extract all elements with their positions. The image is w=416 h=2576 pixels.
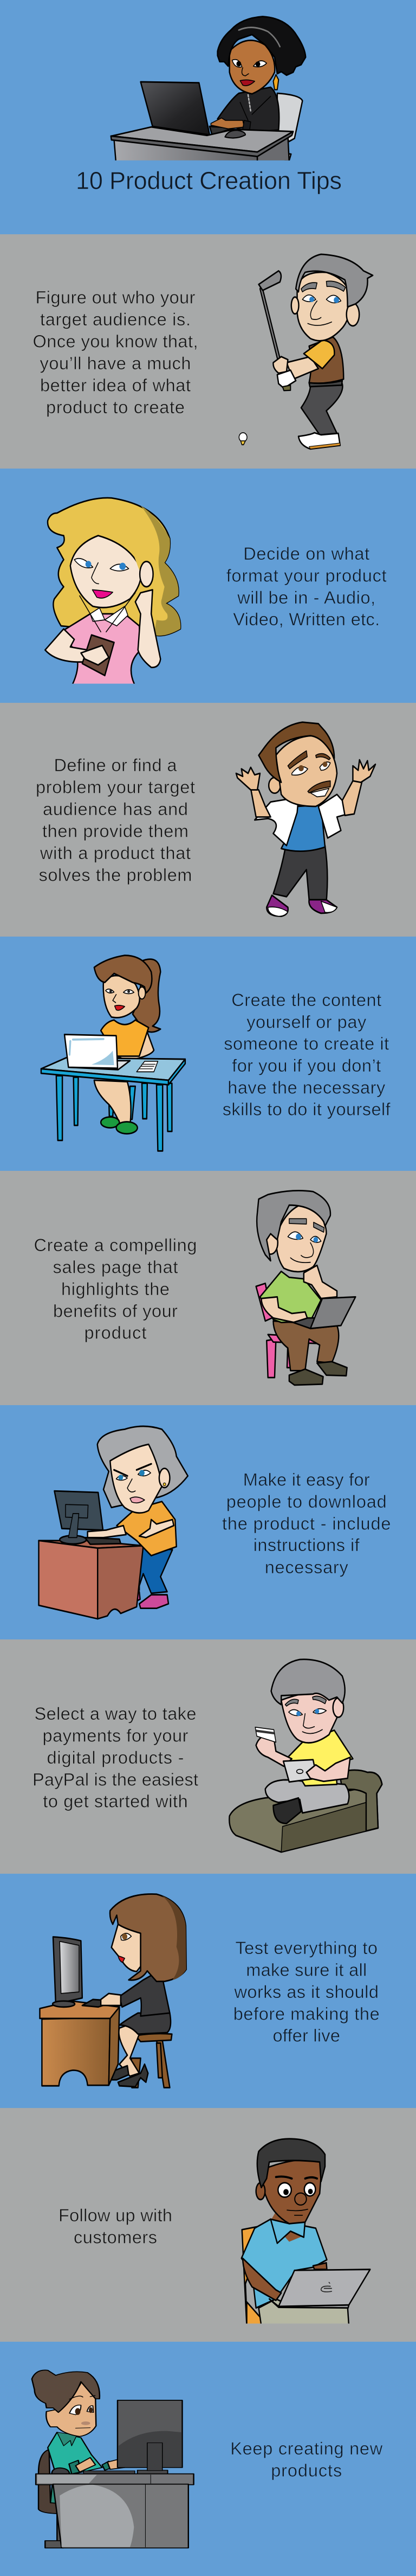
panel: tip 1 target audience — [0, 234, 416, 469]
panel: tip 3 problem — [0, 703, 416, 937]
text: tip 6: necessary — [265, 1558, 348, 1577]
text: tip 4: someone to create it — [224, 1034, 389, 1053]
panel: tip 7 payments — [0, 1639, 416, 1874]
text: tip 10: products — [271, 2461, 342, 2481]
illustration: woman with hair bun at grey desk and monitor — [32, 2370, 194, 2548]
text: tip 2: Video, Written etc. — [233, 610, 380, 629]
illustration: woman with laptop at blue table — [41, 956, 185, 1151]
text: tip 8: before making the — [233, 2004, 380, 2024]
text: tip 7: digital products - — [47, 1748, 184, 1767]
text: tip 5: highlights the — [61, 1279, 170, 1299]
panel: tip 4 content — [0, 937, 416, 1171]
illustration: grey-haired woman at red desk and monitor — [39, 1426, 188, 1619]
text: tip 4: yourself or pay — [246, 1012, 367, 1031]
text: tip 6: the product - include — [222, 1514, 391, 1533]
illustration: thoughtful man with laptop on pink stool — [256, 1190, 355, 1385]
text: tip 8: offer live — [272, 2026, 340, 2046]
text: tip 3: solves the problem — [39, 866, 192, 885]
title: 10 Product Creation Tips — [76, 167, 342, 194]
text: tip 6: Make it easy for — [243, 1470, 370, 1489]
text: tip 3: Define or find a — [54, 755, 177, 775]
panel: tip 5 sales page — [0, 1171, 416, 1405]
illustration: golfer with club — [239, 254, 373, 449]
text: tip 2: will be in - Audio, — [237, 588, 375, 607]
text: tip 6 — [222, 1470, 391, 1577]
text: tip 6: instructions if — [253, 1535, 360, 1555]
text: tip 2: Decide on what — [243, 544, 369, 563]
text: tip 3: audience has and — [43, 799, 188, 819]
text: tip 7 — [32, 1704, 198, 1811]
text: tip 4: have the necessary — [227, 1078, 386, 1097]
text: tip 9: Follow up with — [58, 2206, 172, 2225]
text: tip 7: payments for your — [42, 1726, 188, 1745]
text: tip 4: for you if you don’t — [232, 1056, 381, 1075]
text: tip 8: works as it should — [233, 1982, 379, 2002]
text: tip 4: skills to do it yourself — [223, 1099, 391, 1119]
text: tip 9 — [58, 2206, 172, 2247]
text: tip 1: target audience is. — [40, 310, 191, 329]
text: tip 3: problem your target — [36, 778, 195, 797]
text: tip 6: people to download — [226, 1492, 387, 1511]
text: tip 7: PayPal is the easiest — [32, 1770, 198, 1790]
text: tip 1: you’ll have a much — [40, 354, 191, 373]
panel: tip 10 keep creating — [0, 2342, 416, 2576]
text: tip 1 — [32, 287, 198, 417]
text: tip 8: make sure it all — [246, 1960, 367, 1980]
text: tip 2: format your product — [226, 566, 387, 586]
text: tip 3: then provide them — [42, 822, 188, 841]
panel: tip 8 test — [0, 1874, 416, 2108]
text: tip 2 — [226, 544, 387, 629]
text: tip 5: benefits of your — [53, 1302, 178, 1321]
illustration: blonde woman with phone and earbuds — [45, 498, 180, 686]
text: tip 5: product — [84, 1323, 146, 1343]
text: tip 1: Once you know that, — [32, 331, 198, 351]
illustration: woman at laptop on desk — [111, 17, 306, 163]
text: tip 5: sales page that — [53, 1258, 178, 1277]
text: tip 7: to get started with — [43, 1792, 188, 1811]
text: tip 5: Create a compelling — [34, 1235, 197, 1255]
text: tip 10: Keep creating new — [230, 2439, 383, 2458]
panel: tip 9 follow up — [0, 2108, 416, 2342]
panel: header — [78, 16, 341, 194]
text: tip 1: better idea of what — [40, 375, 191, 395]
text: tip 8 — [233, 1938, 380, 2046]
text: tip 3 — [36, 755, 195, 885]
text: tip 3: with a product that — [40, 843, 191, 863]
text: tip 4: Create the content — [231, 990, 381, 1010]
text: tip 8: Test everything to — [235, 1938, 378, 1958]
illustration: man in blue polo with silver laptop — [242, 2139, 370, 2326]
text: tip 7: Select a way to take — [35, 1704, 196, 1723]
illustration: man with card and tablet on sofa — [229, 1659, 382, 1852]
illustration: woman in side view at wooden desk — [40, 1894, 186, 2088]
text: tip 5 — [34, 1235, 197, 1343]
panel: tip 6 download — [0, 1405, 416, 1639]
illustration: worried man with raised hands — [236, 722, 375, 917]
text: tip 4 — [223, 990, 391, 1119]
text: tip 10 — [230, 2439, 383, 2481]
panel: tip 2 format — [44, 497, 387, 684]
text: tip 9: customers — [74, 2228, 157, 2247]
text: tip 1: product to create — [46, 398, 185, 417]
text: tip 1: Figure out who your — [36, 287, 196, 307]
